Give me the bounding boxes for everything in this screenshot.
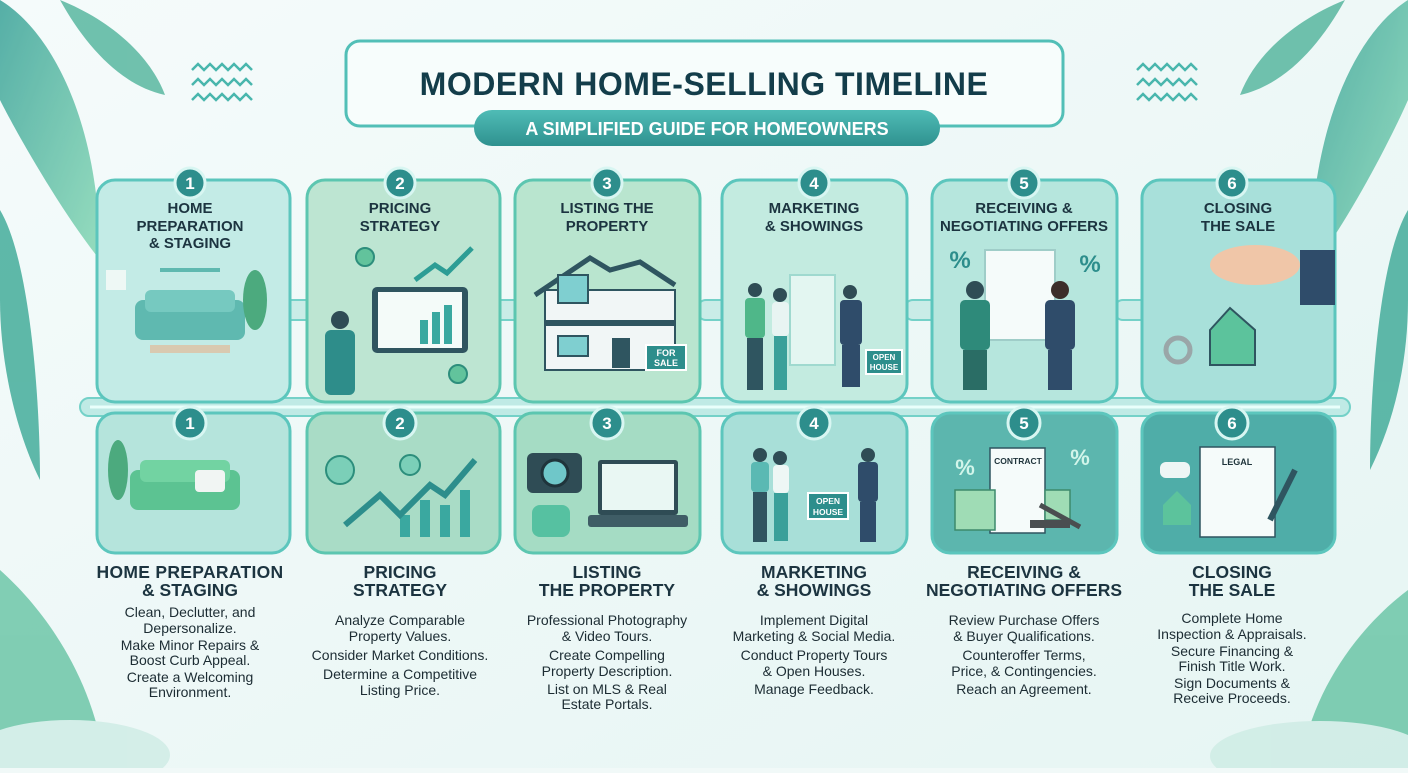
wave decorations <box>192 64 1197 100</box>
text block 6: Secure Financing & <box>1171 643 1294 659</box>
text block 1: Make Minor Repairs & <box>121 637 260 653</box>
illustration: showing: HOUSE <box>813 507 843 517</box>
text block 4: & Open Houses. <box>763 663 865 679</box>
panel 2: pricing: STRATEGY <box>360 218 440 235</box>
text block 6 <box>1157 562 1307 706</box>
text block 2: PRICING <box>364 562 436 582</box>
text block 3: Estate Portals. <box>561 696 653 712</box>
illustration: showing: HOUSE <box>870 363 899 372</box>
text block 5 <box>926 562 1122 697</box>
panel 6: closing <box>1142 168 1335 553</box>
text block 5: Reach an Agreement. <box>956 681 1092 697</box>
panel 1: home preparation: PREPARATION <box>137 218 243 235</box>
text block 3: Professional Photography <box>527 612 687 628</box>
text block 3 <box>527 562 687 712</box>
decorative leaves top-right <box>1240 0 1408 470</box>
text block 6: Complete Home <box>1181 610 1283 626</box>
decorative leaves top-left <box>0 0 165 480</box>
text block 2: STRATEGY <box>353 580 447 600</box>
decorative leaves bottom <box>0 570 1408 773</box>
panel 3: listing: 3 <box>602 414 612 433</box>
panel 6: closing: CLOSING <box>1204 200 1272 217</box>
text block 1: & STAGING <box>142 580 238 600</box>
panel 1: home preparation: & STAGING <box>149 235 231 252</box>
illustration: handshake: % <box>949 247 971 274</box>
illustration: house for sale: FOR <box>656 348 676 358</box>
illustration: handshake: % <box>955 455 975 480</box>
panel 3: listing: 3 <box>602 174 612 193</box>
illustration: chart presentation <box>325 248 475 537</box>
text block 6: THE SALE <box>1189 580 1275 600</box>
text block 1: Boost Curb Appeal. <box>130 652 250 668</box>
title box <box>346 41 1063 126</box>
text block 2: Determine a Competitive <box>323 666 477 682</box>
text block 3: Create Compelling <box>549 647 665 663</box>
text block 2: Listing Price. <box>360 682 440 698</box>
illustration: keys: LEGAL <box>1222 457 1253 467</box>
subtitle pill <box>474 110 940 146</box>
text block 5: RECEIVING & <box>967 562 1081 582</box>
panel 5: offers: RECEIVING & <box>975 200 1073 217</box>
panel 6: closing: THE SALE <box>1201 218 1275 235</box>
panel 6: closing: 6 <box>1227 414 1237 433</box>
text block 1: Environment. <box>149 684 231 700</box>
text block 2: Analyze Comparable <box>335 612 465 628</box>
panel 2: pricing: PRICING <box>369 200 431 217</box>
text block 6: Receive Proceeds. <box>1173 690 1291 706</box>
text block 3: List on MLS & Real <box>547 681 667 697</box>
text block 1 <box>97 562 283 700</box>
text block 4 <box>733 562 895 697</box>
text block 4: Implement Digital <box>760 612 868 628</box>
illustration: house for sale <box>527 258 688 537</box>
text block 4: Manage Feedback. <box>754 681 874 697</box>
text block 6: Inspection & Appraisals. <box>1157 626 1307 642</box>
illustration: showing <box>745 275 902 542</box>
text block 3: THE PROPERTY <box>539 580 675 600</box>
text block 2: Property Values. <box>349 628 451 644</box>
text block 1: HOME PREPARATION <box>97 562 283 582</box>
illustration: handshake <box>949 247 1101 533</box>
panel 4: marketing: 4 <box>809 174 819 193</box>
text block 3: Property Description. <box>542 663 672 679</box>
text block 5: & Buyer Qualifications. <box>953 628 1095 644</box>
panel 5: offers: 5 <box>1019 414 1029 433</box>
text block 5: Review Purchase Offers <box>949 612 1099 628</box>
illustration: keys <box>1160 245 1335 537</box>
panel 3: listing: PROPERTY <box>566 218 648 235</box>
panel 2: pricing: 2 <box>395 414 405 433</box>
illustration: house for sale: SALE <box>654 358 678 368</box>
text block 2: Consider Market Conditions. <box>312 647 488 663</box>
illustration: handshake: CONTRACT <box>994 456 1043 466</box>
subtitle pill: A SIMPLIFIED GUIDE FOR HOMEOWNERS <box>525 119 889 139</box>
text block 6: Finish Title Work. <box>1178 658 1286 674</box>
text block 4: MARKETING <box>761 562 867 582</box>
illustration: handshake: % <box>1079 251 1101 278</box>
panel 4: marketing: 4 <box>809 414 819 433</box>
panel 1: home preparation: 1 <box>185 174 195 193</box>
text block 1: Clean, Declutter, and <box>125 604 255 620</box>
text block 1: Create a Welcoming <box>127 669 253 685</box>
timeline connector band <box>80 300 1350 416</box>
text block 6: CLOSING <box>1192 562 1272 582</box>
text block 3: LISTING <box>572 562 642 582</box>
panel 3: listing <box>515 168 700 553</box>
panel 4: marketing: & SHOWINGS <box>765 218 863 235</box>
panel 1: home preparation: 1 <box>185 414 195 433</box>
panel 5: offers <box>932 168 1117 553</box>
panel 4: marketing <box>722 168 907 553</box>
panel 2: pricing: 2 <box>395 174 405 193</box>
text block 4: Conduct Property Tours <box>741 647 887 663</box>
panel 1: home preparation: HOME <box>168 200 212 217</box>
panel 2: pricing <box>307 168 500 553</box>
panel 3: listing: LISTING THE <box>560 200 654 217</box>
illustration: showing: OPEN <box>816 496 840 506</box>
illustration: showing: OPEN <box>873 353 896 362</box>
illustration: handshake: % <box>1070 445 1090 470</box>
panel 6: closing: 6 <box>1227 174 1237 193</box>
panel 5: offers: 5 <box>1019 174 1029 193</box>
text block 4: & SHOWINGS <box>757 580 871 600</box>
text block 3: & Video Tours. <box>562 628 652 644</box>
text block 5: Price, & Contingencies. <box>951 663 1097 679</box>
panel 5: offers: NEGOTIATING OFFERS <box>940 218 1108 235</box>
text block 5: NEGOTIATING OFFERS <box>926 580 1122 600</box>
text block 2 <box>312 562 488 698</box>
panel 1: home preparation <box>97 168 290 553</box>
panel 4: marketing: MARKETING <box>769 200 859 217</box>
title box: MODERN HOME-SELLING TIMELINE <box>420 66 988 102</box>
text block 1: Depersonalize. <box>143 620 237 636</box>
text block 5: Counteroffer Terms, <box>962 647 1086 663</box>
text block 6: Sign Documents & <box>1174 675 1291 691</box>
text block 4: Marketing & Social Media. <box>733 628 895 644</box>
illustration: living room <box>106 268 267 510</box>
